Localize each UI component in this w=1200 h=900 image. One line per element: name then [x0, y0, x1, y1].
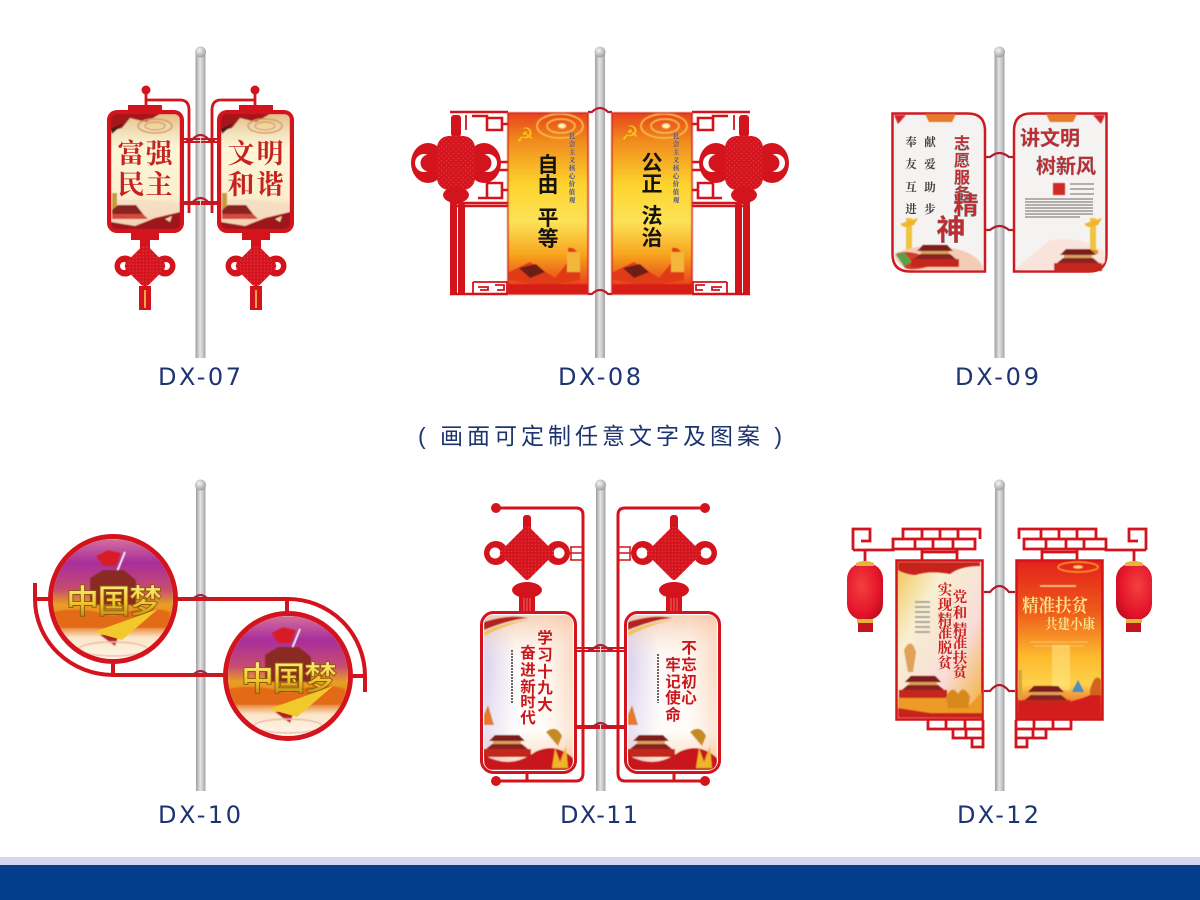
left poster: 志愿服务精神	[892, 114, 985, 272]
DX-10 lamp pole unit	[35, 480, 365, 829]
right poster: 精准扶贫 共建小康	[1016, 560, 1102, 720]
curved frame arms	[35, 583, 365, 692]
right poster: 讲文明树新风: 树新风	[1036, 155, 1096, 178]
right poster: 精准扶贫 共建小康: 共建小康	[1045, 616, 1095, 633]
upper circular sign 中国梦	[50, 536, 176, 662]
right lantern frame and knot	[201, 86, 294, 310]
pole clamps	[188, 595, 213, 675]
right poster: 不忘初心 牢记使命: 牢记使命	[665, 656, 681, 724]
DX-11 lamp pole unit	[482, 480, 720, 829]
left poster: 志愿服务精神: 奉献友爱互助进步	[905, 135, 937, 216]
right arm frame and knot	[601, 503, 717, 786]
lower circular sign 中国梦	[225, 614, 351, 738]
left poster: 学习十九大 奋进新时代: 奋进新时代	[520, 644, 536, 727]
left poster: 精准脱贫: 实现精准脱贫	[938, 582, 953, 672]
label DX-08: DX-08	[558, 363, 641, 391]
left lantern frame and knot	[107, 86, 200, 310]
right poster: 不忘初心 牢记使命: 不忘初心	[681, 640, 697, 707]
label DX-09: DX-09	[955, 363, 1039, 391]
small caption lines	[1025, 184, 1094, 217]
label DX-12: DX-12	[957, 801, 1039, 829]
DX-08 lamp pole unit	[411, 46, 789, 391]
DX-09 lamp pole unit	[892, 46, 1106, 391]
right lattice and lantern	[1016, 529, 1152, 747]
pole	[994, 46, 1005, 358]
pole	[195, 480, 206, 791]
pole clamps	[186, 135, 215, 203]
left poster: 学习十九大 奋进新时代: 学习十九大	[537, 628, 553, 714]
left poster: 志愿服务精神: 精	[953, 192, 979, 220]
left arm frame and knot	[484, 503, 600, 786]
pole clamps	[588, 645, 613, 727]
right poster: 文明和谐: 文明和谐	[228, 139, 284, 200]
left banner poster: 社会主义核心价值观	[569, 131, 577, 204]
footer band	[0, 857, 1200, 900]
left poster: 精准脱贫: 党和精准扶贫	[953, 588, 968, 681]
label DX-10: DX-10	[158, 801, 241, 829]
left poster: 富强民主	[111, 114, 180, 229]
left poster: 精准脱贫	[896, 560, 982, 720]
small text column	[511, 650, 513, 703]
label DX-07: DX-07	[158, 363, 241, 391]
right poster: 文明和谐	[221, 114, 290, 229]
pole clamps	[986, 153, 1013, 230]
right poster: 讲文明树新风	[1014, 114, 1106, 272]
label DX-11: DX-11	[560, 801, 638, 829]
pole clamps	[984, 586, 1015, 691]
left banner poster: ☭	[516, 123, 534, 147]
right lattice frame and knot	[692, 112, 789, 295]
left banner poster	[508, 113, 588, 294]
left poster: 志愿服务精神: 神	[936, 214, 966, 247]
lower circular sign 中国梦: 中国梦	[241, 660, 337, 697]
left poster: 富强民主: 富强民主	[118, 138, 174, 200]
left poster: 学习十九大 奋进新时代	[482, 612, 576, 772]
left lattice frame and knot	[411, 112, 508, 295]
right poster: 精准扶贫 共建小康: 精准扶贫	[1022, 595, 1088, 616]
right banner poster: 社会主义核心价值观	[673, 131, 681, 204]
check mark swoosh	[269, 686, 333, 717]
right banner poster: ☭	[621, 121, 639, 145]
pole clamps and inner rails	[588, 108, 612, 294]
right poster: 不忘初心 牢记使命	[626, 612, 720, 772]
right poster: 讲文明树新风: 讲文明	[1020, 126, 1080, 150]
pole	[594, 46, 606, 358]
DX-12 lamp pole unit	[847, 480, 1152, 829]
pole	[195, 46, 206, 358]
left lattice and lantern	[847, 529, 983, 747]
right banner poster: 公正法治	[642, 152, 662, 250]
left banner poster: 自由平等	[538, 154, 558, 251]
check mark swoosh	[94, 609, 158, 640]
right banner poster	[612, 113, 692, 294]
caption: ( 画面可定制任意文字及图案 )	[418, 423, 782, 449]
upper circular sign 中国梦: 中国梦	[66, 583, 162, 620]
DX-07 lamp pole unit	[107, 46, 294, 391]
small text column	[657, 654, 659, 703]
left poster: 志愿服务精神: 志愿服务	[954, 135, 970, 203]
pole	[595, 480, 606, 791]
pole	[994, 480, 1005, 791]
